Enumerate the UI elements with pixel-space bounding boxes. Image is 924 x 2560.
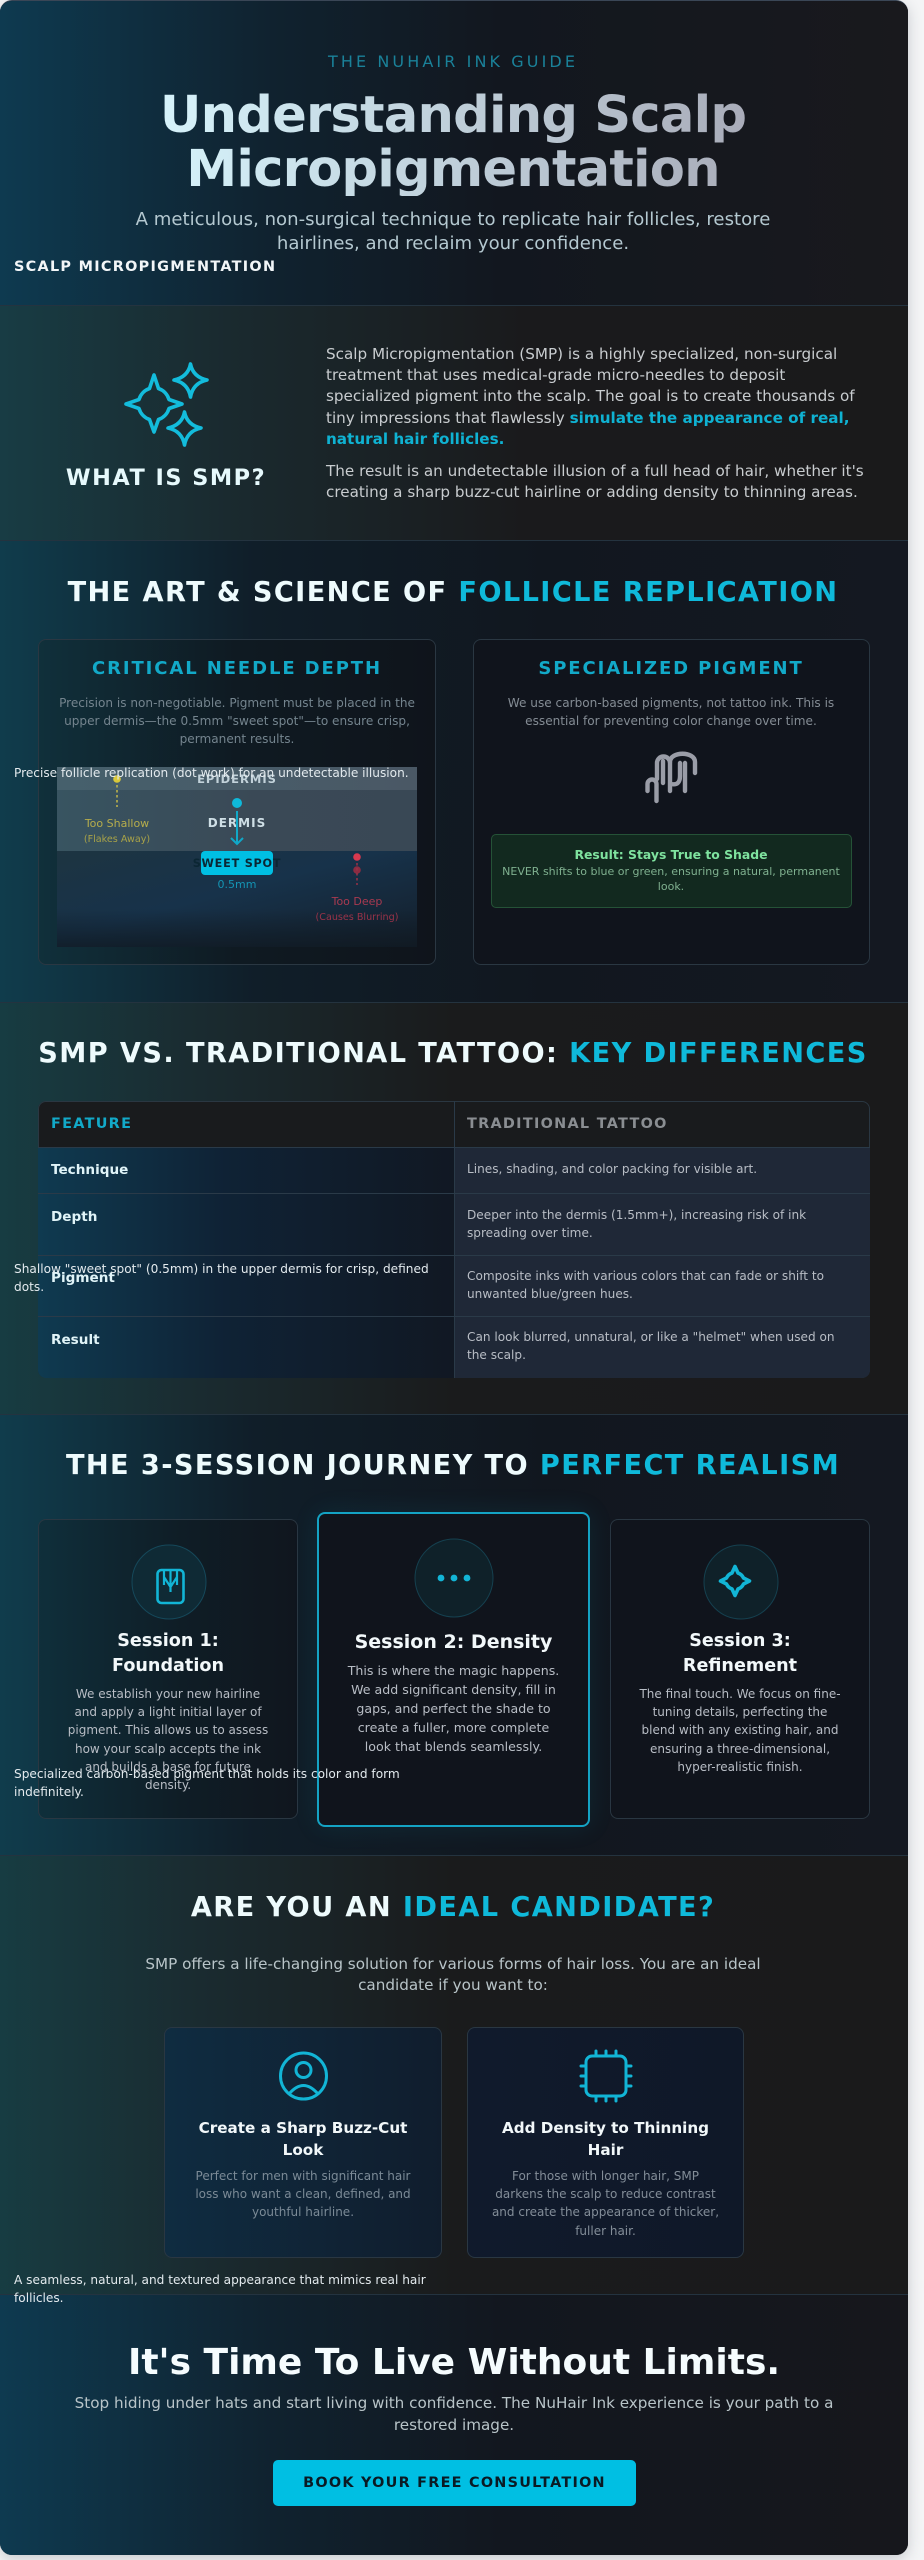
overlay text: specialized pigment: indefinitely. [14,1785,84,1799]
callout text: look. [658,880,684,893]
card text [492,2169,719,2238]
title: Understanding Scalp [160,85,746,145]
panel: session 1 [38,1519,298,1819]
callout: stays true to shade [491,834,852,908]
intro text: SMP offers a life-changing solution for various forms of hair loss. You are an ideal [145,1955,761,1973]
text: SMP definition: treatment that uses medical-grade micro-needles to deposit [326,366,785,384]
card title: Hair [588,2141,623,2159]
text: SMP result [326,462,864,501]
panel heading: SPECIALIZED PIGMENT [538,658,804,679]
session 1 text: We establish your new hairline [76,1687,260,1701]
marker: too deep: (Causes Blurring) [316,912,398,923]
panel: sharp buzz-cut [164,2027,442,2258]
row text: pigment: unwanted blue/green hues. [467,1287,633,1301]
marker: sweet spot: 0.5mm [218,878,256,891]
button: book consultation [273,2460,636,2506]
row: technique: Technique [51,1162,128,1178]
card text: Perfect for men with significant hair [196,2169,410,2183]
text: SMP definition [326,345,855,448]
text: SMP definition: Scalp Micropigmentation (SMP) is a highly specialized, non-surgical [326,345,837,363]
subtitle [136,209,770,254]
section: art and science [0,541,908,1003]
overlay label: scalp micropigmentation: SCALP MICROPIGMENTATION [14,259,276,275]
card title [199,2119,408,2159]
overlay text: shallow sweet spot: dots. [14,1280,44,1294]
marker: too deep: Too Deep [331,895,382,908]
session 2 text: look that blends seamlessly. [365,1739,542,1754]
intro text [145,1955,761,1994]
row text: result: the scalp. [467,1348,526,1362]
card text: darkens the scalp to reduce contrast [495,2187,716,2201]
panel: session 2 [317,1512,590,1827]
session 2 text: We add significant density, fill in [351,1682,556,1697]
session 2 text: create a fuller, more complete [358,1720,549,1735]
icon: chip [580,2050,632,2102]
overlay text: shallow sweet spot [14,1262,429,1294]
session 2 text: This is where the magic happens. [348,1663,559,1678]
card title: Look [283,2141,323,2159]
session 3 title: Refinement [683,1656,797,1676]
panel: session 3 [610,1519,870,1819]
callout text: NEVER shifts to blue or green, ensuring a natural, permanent [502,865,840,878]
row text: result: Can look blurred, unnatural, or like a "helmet" when used on [467,1330,835,1344]
section: comparison [0,1003,908,1415]
heading: follicle replication: THE ART & SCIENCE OF FOLLICLE REPLICATION [68,577,838,608]
text: SMP definition: tiny impressions that flawlessly simulate the appearance of real, [326,409,850,427]
overlay text: shallow sweet spot: Shallow "sweet spot" (0.5mm) in the upper dermis for crisp, defined [14,1262,429,1276]
marker: too deep [316,853,398,923]
session 1 title: Session 1: [117,1631,219,1651]
panel heading: CRITICAL NEEDLE DEPTH [92,658,382,679]
panel text: Precision is non-negotiable. Pigment must be placed in the [59,696,415,710]
section: call to action [0,2295,908,2556]
session 2 title: Session 2: Density [355,1631,552,1653]
session 3 text: The final touch. We focus on fine- [639,1687,841,1701]
table grid lines [38,1102,870,1378]
subtitle: A meticulous, non-surgical technique to replicate hair follicles, restore [136,209,770,230]
session 3 text: tuning details, perfecting the [653,1705,827,1719]
section: header [0,1,908,306]
session 1 text: how your scalp accepts the ink [75,1742,261,1756]
session 3 text: hyper-realistic finish. [677,1760,803,1774]
row: result: Result [51,1332,100,1348]
session 1 text: and builds a base for future [85,1760,251,1774]
card text [195,2169,411,2219]
row text: depth: Deeper into the dermis (1.5mm+), increasing risk of ink [467,1208,806,1222]
heading: live without limits: It's Time To Live Without Limits. [128,2342,780,2383]
callout text [502,865,840,893]
card text: For those with longer hair, SMP [512,2169,699,2183]
marker: sweet spot: SWEET SPOT [193,857,281,870]
overlay text: specialized pigment: Specialized carbon-based pigment that holds its color and form [14,1767,400,1781]
heading: ideal candidate: ARE YOU AN IDEAL CANDIDATE? [191,1892,715,1923]
header: feature: FEATURE [51,1116,132,1132]
overlay text: specialized pigment [14,1767,400,1799]
intro text: candidate if you want to: [358,1976,548,1994]
panel: specialized pigment [473,639,870,965]
icon: session 2 circle [414,1538,494,1618]
icon: person [279,2052,328,2100]
marker: sweet spot [193,798,281,891]
panel text: essential for preventing color change over time. [525,714,817,728]
session 3 text: blend with any existing hair, and [642,1723,838,1737]
row text: depth: spreading over time. [467,1226,593,1240]
text: SMP result: The result is an undetectable illusion of a full head of hair, whether it's [326,462,864,480]
session 1 text: and apply a light initial layer of [74,1705,262,1719]
text: CTA message: Stop hiding under hats and start living with confidence. The NuHair Ink experience is your path to a [75,2394,833,2412]
header: traditional tattoo: TRADITIONAL TATTOO [467,1116,668,1132]
text: CTA message: restored image. [394,2416,514,2434]
heading: what is SMP: WHAT IS SMP? [66,465,266,491]
card title [502,2119,709,2159]
text: SMP definition: specialized pigment into the scalp. The goal is to create thousands of [326,387,855,405]
session 1 title [112,1631,224,1676]
diagram: skin layers [57,767,417,947]
panel text [59,696,415,746]
callout title: Result: Stays True to Shade [574,847,768,862]
marker: too shallow: (Flakes Away) [84,834,150,845]
row: pigment: Pigment [51,1270,115,1286]
text: SMP result: creating a sharp buzz-cut hairline or adding density to thinning areas. [326,483,858,501]
section: three sessions [0,1415,908,1856]
session 1 text [68,1687,268,1792]
session 1 text: pigment. This allows us to assess [68,1723,268,1737]
row text: pigment [467,1269,824,1301]
card text: loss who want a clean, defined, and [195,2187,411,2201]
session 3 text [639,1687,841,1774]
session 2 text [348,1663,559,1754]
text: CTA message [75,2394,833,2434]
card title: Create a Sharp Buzz-Cut [199,2119,407,2137]
panel text: upper dermis—the 0.5mm "sweet spot"—to ensure crisp, [64,714,410,728]
overlay text: seamless appearance [14,2273,426,2305]
title: Micropigmentation [186,139,720,199]
card title: Add Density to Thinning [502,2119,709,2137]
session 3 title: Session 3: [689,1631,791,1651]
eyebrow: THE NUHAIR INK GUIDE [328,52,578,71]
card text: youthful hairline. [252,2205,354,2219]
overlay text: seamless appearance: follicles. [14,2291,64,2305]
text: SMP definition: natural hair follicles. [326,430,504,448]
session 3 text: ensuring a three-dimensional, [650,1742,830,1756]
row text: depth [467,1208,806,1240]
heading: perfect realism: THE 3-SESSION JOURNEY TO PERFECT REALISM [66,1450,840,1481]
icon: sparkles [124,362,209,447]
title [160,89,746,196]
panel: critical needle depth [38,639,436,965]
subtitle: hairlines, and reclaim your confidence. [277,233,629,254]
icon: session 1 circle [132,1544,206,1620]
overlay text: seamless appearance: A seamless, natural, and textured appearance that mimics real hair [14,2273,426,2287]
marker: too shallow: Too Shallow [84,817,149,830]
row: depth: Depth [51,1209,97,1225]
section: what is SMP [0,306,908,541]
heading: key differences: SMP VS. TRADITIONAL TATTOO: KEY DIFFERENCES [38,1038,868,1069]
row text: pigment: Composite inks with various colors that can fade or shift to [467,1269,824,1283]
right column rows [454,1147,870,1378]
section: ideal candidate [0,1856,908,2295]
session 1 text: density. [145,1778,191,1792]
icon: pigment fingerprint [645,752,698,804]
overlay text: precise follicle replication: Precise follicle replication (dot work) for an undetectable illusion. [14,766,409,780]
marker: too shallow [84,775,150,845]
panel: add density [467,2027,744,2258]
panel text [508,696,834,728]
card text: and create the appearance of thicker, [492,2205,719,2219]
comparison table [38,1101,870,1378]
layer label: dermis: DERMIS [208,816,266,830]
row text: technique: Lines, shading, and color packing for visible art. [467,1162,757,1176]
layer label: epidermis: EPIDERMIS [197,772,277,786]
session 1 title: Foundation [112,1656,224,1676]
panel text: We use carbon-based pigments, not tattoo ink. This is [508,696,834,710]
panel text: permanent results. [180,732,294,746]
left column rows [38,1147,454,1378]
session 2 text: gaps, and perfect the shade to [356,1701,551,1716]
row text: result [467,1330,835,1362]
card text: fuller hair. [575,2224,636,2238]
session 3 title [683,1631,797,1676]
button: book consultation: BOOK YOUR FREE CONSULTATION [303,2475,606,2491]
icon: session 3 circle [704,1544,778,1620]
